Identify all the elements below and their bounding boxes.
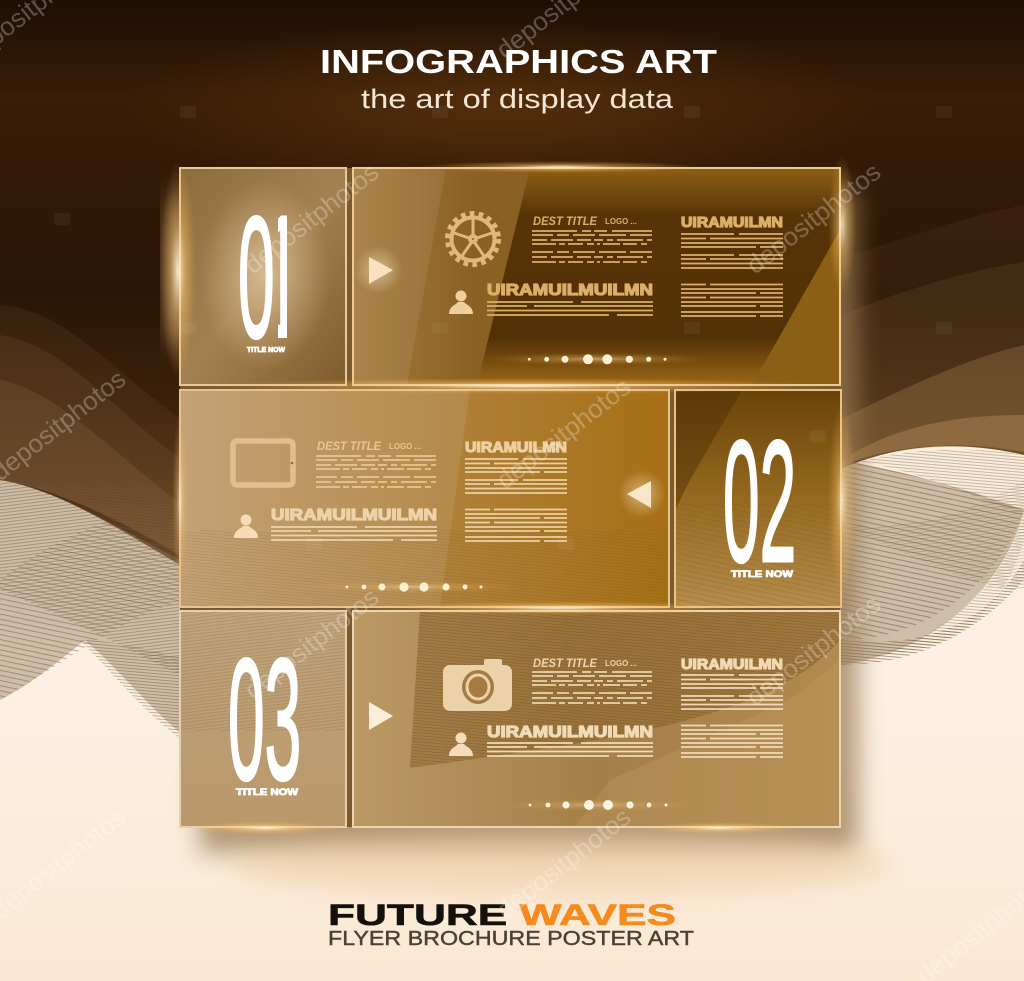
paragraph lines xyxy=(532,231,652,262)
background: dark upper wave xyxy=(0,0,1024,589)
light flare: left of panel 01 xyxy=(160,160,196,380)
text block: panel 3 xyxy=(487,656,783,757)
column sub heading: LOGO ... xyxy=(605,217,637,226)
column heading left: DEST TITLE xyxy=(317,439,382,453)
background: warm light behind board xyxy=(120,20,880,200)
icon: user middle xyxy=(234,514,258,538)
lower heading: UIRAMUILMUILMN xyxy=(487,724,653,741)
tagline: FLYER BROCHURE POSTER ART xyxy=(328,928,694,950)
watermarks: depositphotos xyxy=(238,581,384,705)
dots: panel 3 xyxy=(497,799,697,811)
lower heading: UIRAMUILMUILMN xyxy=(487,282,653,299)
number 02: 02 xyxy=(723,405,796,598)
caption 02: TITLE NOW xyxy=(731,569,794,579)
dots: panel 1 xyxy=(487,353,707,365)
dots: panel 2 xyxy=(304,581,524,593)
text block: panel 2 xyxy=(271,439,567,541)
light flare: left of middle panel xyxy=(172,410,188,590)
arrow: panel 2 xyxy=(618,470,666,518)
column heading right: UIRAMUILMN xyxy=(681,656,783,673)
brand name: FUTURE WAVES xyxy=(328,899,676,932)
watermark camera marks xyxy=(54,106,952,550)
column heading right: UIRAMUILMN xyxy=(465,439,567,456)
caption 01: TITLE NOW xyxy=(247,347,285,354)
number 01 xyxy=(240,215,287,352)
right column lines xyxy=(681,234,783,316)
icon: user top xyxy=(449,290,473,314)
mesh wave right xyxy=(840,450,1024,665)
title: INFOGRAPHICS ART xyxy=(320,43,717,80)
column heading right: UIRAMUILMN xyxy=(681,214,783,231)
right column lines xyxy=(681,675,783,757)
panel: top content xyxy=(353,168,840,385)
number 01: 1 xyxy=(248,177,319,376)
light flare: right edge xyxy=(828,155,856,295)
subtitle: the art of display data xyxy=(361,84,674,114)
lower lines xyxy=(487,743,653,756)
soft warm glow under the board xyxy=(230,835,890,895)
panel drop shadow xyxy=(200,190,858,852)
wave bands: left translucent ribbons xyxy=(0,305,190,562)
icon: user bottom xyxy=(449,732,473,756)
lower lines xyxy=(487,302,653,315)
text block: panel 1 xyxy=(487,214,783,316)
watermarks: depositphotos xyxy=(740,588,886,712)
column heading left: DEST TITLE xyxy=(533,656,598,670)
light flare: bottom left xyxy=(190,821,340,835)
lower heading: UIRAMUILMUILMN xyxy=(271,507,437,524)
halo: left of panel 01 xyxy=(166,190,186,350)
panel: middle content xyxy=(180,390,669,607)
number 03: 03 xyxy=(228,623,301,816)
column sub heading: LOGO ... xyxy=(389,442,421,451)
watermarks: depositphotos xyxy=(490,371,636,495)
panel: bottom content xyxy=(353,611,840,827)
wave bands: right translucent ribbons xyxy=(830,205,1024,470)
paragraph lines xyxy=(316,456,436,487)
board backing visible through gaps xyxy=(180,168,840,827)
watermarks: depositphotos xyxy=(238,156,384,280)
light flare: middle divider xyxy=(210,378,830,394)
icon: tablet xyxy=(233,441,293,485)
watermarks: depositphotos xyxy=(740,156,886,280)
right column lines xyxy=(465,459,567,541)
light flare: top edge xyxy=(420,161,700,173)
arrow: panel 3 xyxy=(369,702,393,730)
panel: 02 xyxy=(675,390,841,607)
mesh wave left xyxy=(0,480,190,745)
icon: camera xyxy=(443,659,512,711)
panel: 03 xyxy=(180,611,346,827)
lower lines xyxy=(271,527,437,540)
icon: gear xyxy=(448,214,498,264)
caption 03: TITLE NOW xyxy=(236,787,299,797)
light flare: lower divider xyxy=(370,601,750,615)
paragraph lines xyxy=(532,672,652,703)
number 01: 0 xyxy=(238,181,275,374)
column sub heading: LOGO ... xyxy=(605,659,637,668)
arrow: panel 1 xyxy=(354,246,402,294)
column heading left: DEST TITLE xyxy=(533,214,598,228)
light flare: right of panel 02 xyxy=(828,400,856,600)
watermarks: depositphotos xyxy=(490,801,636,925)
panel: 01 xyxy=(180,168,346,385)
light flare: bottom right xyxy=(640,822,800,834)
